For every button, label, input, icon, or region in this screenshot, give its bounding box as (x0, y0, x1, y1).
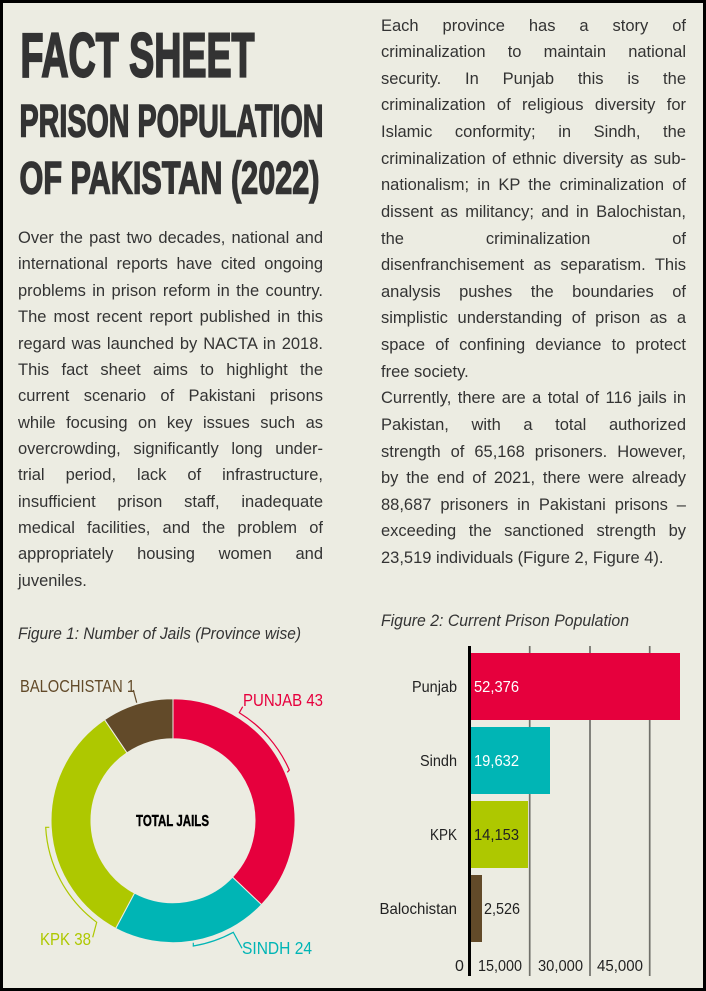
text block: provinces and jail totals: disenfranchisement as separatism. This (381, 256, 686, 274)
text block: provinces and jail totals: exceeding the sanctioned strength by (381, 522, 686, 540)
bar: Balochistan: Balochistan (380, 901, 457, 918)
text block: provinces and jail totals: 23,519 individuals (Figure 2, Figure 4). (381, 549, 663, 567)
bar: Punjab: Punjab (412, 679, 457, 696)
text block: provinces and jail totals: by the end of 2021, there were already (381, 469, 686, 487)
text block: provinces and jail totals: simplistic understanding of prison as a (381, 309, 686, 327)
figure 2 caption: Figure 2: Current Prison Population (381, 611, 629, 630)
axis labels: 15,000 (478, 958, 522, 975)
text block: provinces and jail totals: criminalization of ethnic diversity as sub- (381, 150, 686, 168)
text block: introduction: juveniles. (18, 572, 87, 590)
axis labels: 30,000 (538, 958, 583, 975)
axis labels (455, 958, 643, 975)
donut centre label: TOTAL JAILS (136, 813, 209, 830)
bar: Punjab: 52,376 (474, 679, 519, 696)
segment: Balochistan (105, 699, 173, 753)
text block: provinces and jail totals: analysis pushes the boundaries of (381, 283, 686, 301)
bar: KPK: KPK (430, 827, 457, 844)
title (20, 22, 324, 204)
text block: provinces and jail totals: security. In Punjab this is the (381, 70, 686, 88)
text block: provinces and jail totals: free society. (381, 363, 469, 381)
text block: introduction: This fact sheet aims to highlight the (18, 361, 323, 379)
title: OF PAKISTAN (2022) (20, 152, 320, 204)
text block: introduction: Over the past two decades, national and (18, 229, 323, 247)
callout: KPK: KPK 38 (40, 929, 91, 949)
text block: provinces and jail totals: criminalization to maintain national (381, 43, 686, 61)
text block: introduction: problems in prison reform in the country. (18, 282, 323, 300)
bar: Punjab (412, 653, 680, 720)
bar: Sindh: Sindh (420, 753, 457, 770)
title: FACT SHEET (20, 22, 255, 90)
axis labels: 45,000 (597, 958, 643, 975)
text block: provinces and jail totals: the criminalization of (381, 230, 686, 248)
text block: provinces and jail totals: criminalization of religious diversity for (381, 96, 686, 114)
callout: Sindh (193, 932, 312, 958)
segment: KPK (51, 720, 134, 928)
text block: provinces and jail totals: Each province has a story of (381, 17, 686, 35)
text block: introduction: regard was launched by NACTA in 2018. (18, 335, 323, 353)
callout: Punjab: PUNJAB 43 (243, 690, 323, 710)
bar: Sindh (420, 727, 550, 794)
text block: introduction: while focusing on key issues such as (18, 414, 323, 432)
text block: provinces and jail totals: nationalism; in KP the criminalization of (381, 176, 686, 194)
text block: introduction: current scenario of Pakistani prisons (18, 387, 323, 405)
text block: provinces and jail totals: 88,687 prisoners in Pakistani prisons – (381, 496, 686, 514)
bar: KPK (430, 801, 528, 868)
text block: provinces and jail totals: space of confining deviance to protect (381, 336, 686, 354)
callout: Balochistan: BALOCHISTAN 1 (20, 676, 135, 696)
bar: Sindh: 19,632 (474, 753, 519, 770)
bar: Balochistan: 2,526 (484, 901, 520, 918)
segment: Punjab (173, 699, 295, 905)
axis labels: 0 (455, 958, 464, 975)
text block: provinces and jail totals (381, 17, 686, 567)
text block: introduction (18, 229, 323, 590)
segment: Sindh (116, 877, 262, 943)
text block: introduction: The most recent report published in this (18, 308, 323, 326)
text block: introduction: appropriately housing women and (18, 545, 323, 563)
callout: Punjab (239, 690, 323, 772)
bar: KPK: 14,153 (474, 827, 519, 844)
text block: introduction: insufficient prison staff, inadequate (18, 493, 323, 511)
text block: provinces and jail totals: Islamic conformity; in Sindh, the (381, 123, 686, 141)
callout: KPK (40, 827, 97, 949)
bar chart: current prison population (380, 646, 680, 976)
callout: Balochistan (20, 676, 137, 703)
text block: introduction: overcrowding, significantly long under- (18, 440, 323, 458)
bar: Balochistan (380, 875, 520, 942)
text block: provinces and jail totals: strength of 65,168 prisoners. However, (381, 443, 686, 461)
donut chart: number of jails (20, 676, 323, 958)
callout: Sindh: SINDH 24 (242, 938, 312, 958)
title: PRISON POPULATION (20, 96, 324, 146)
text block: provinces and jail totals: dissent as militancy; and in Balochistan, (381, 203, 686, 221)
text block: introduction: medical facilities, and the problem of (18, 519, 323, 537)
text block: provinces and jail totals: Pakistan, with a total authorized (381, 416, 686, 434)
figure 1 caption: Figure 1: Number of Jails (Province wise) (18, 624, 301, 643)
text block: provinces and jail totals: Currently, there are a total of 116 jails in (381, 389, 686, 407)
text block: introduction: international reports have cited ongoing (18, 255, 323, 273)
text block: introduction: trial period, lack of infrastructure, (18, 466, 323, 484)
